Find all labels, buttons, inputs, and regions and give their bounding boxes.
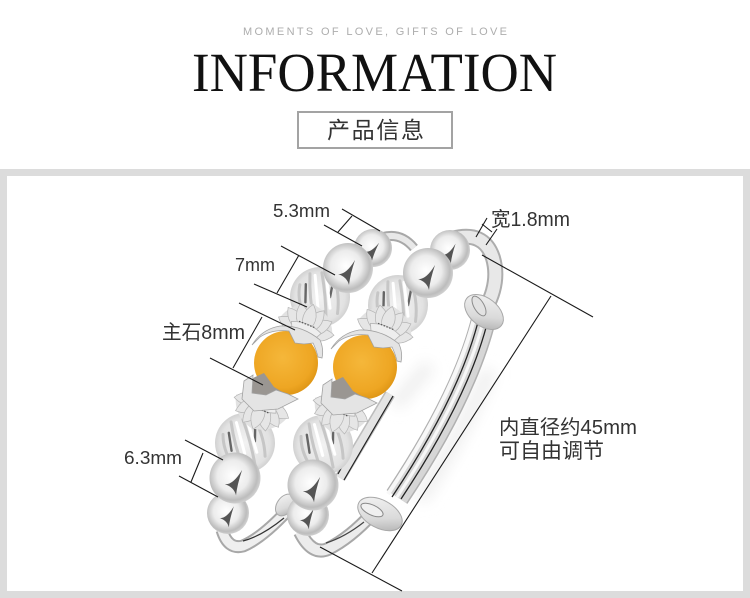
panel frame <box>0 169 750 598</box>
label: 7mm: 7mm <box>235 255 275 275</box>
sliding rings <box>272 287 510 538</box>
label: width 1.8mm: 宽1.8mm <box>491 208 570 231</box>
stone prongs <box>242 326 402 415</box>
label: 6.3mm: 6.3mm <box>124 448 182 468</box>
label: 5.3mm: 5.3mm <box>273 201 330 221</box>
label: main stone 8mm: 主石8mm <box>162 321 245 344</box>
dimension lines <box>179 209 593 591</box>
left bracelet band <box>222 236 414 547</box>
soft shadows <box>395 365 490 500</box>
right bracelet beads <box>286 230 470 536</box>
amber stones <box>254 331 397 399</box>
header: subtitle box: 产品信息 <box>327 117 424 143</box>
header: subtitle box <box>298 112 452 148</box>
header: title: INFORMATION <box>192 42 557 103</box>
right bracelet band <box>300 237 495 551</box>
label: inner diameter: 内直径约45mm <box>499 416 637 439</box>
header: tagline: MOMENTS OF LOVE, GIFTS OF LOVE <box>243 26 507 38</box>
bracelet photo <box>207 227 510 551</box>
left bracelet beads <box>207 227 394 534</box>
label: adjustable: 可自由调节 <box>499 440 604 463</box>
flower caps <box>224 293 423 444</box>
